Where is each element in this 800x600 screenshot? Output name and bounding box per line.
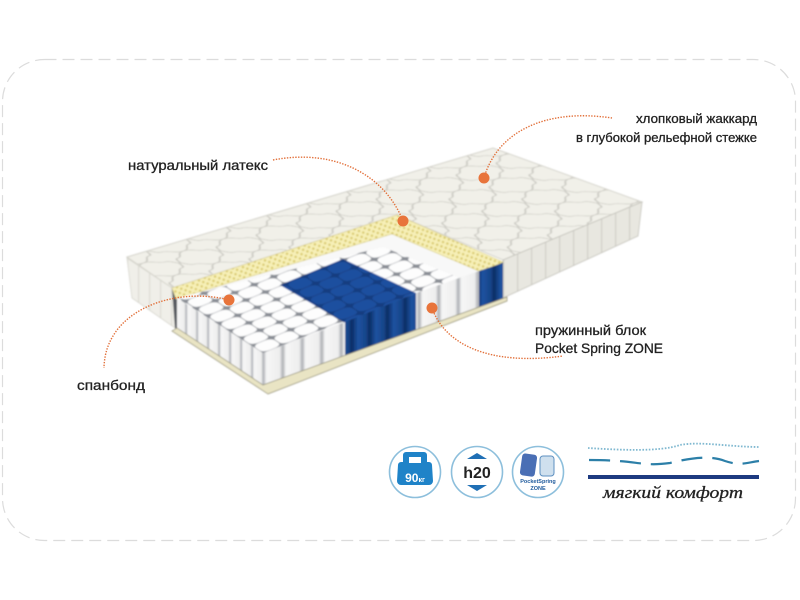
label: cotton jacquard	[576, 111, 757, 145]
label: spring block: пружинный блок	[535, 322, 647, 338]
callout: spring block	[426, 302, 563, 358]
front coils, blue section	[345, 293, 416, 356]
label: cotton jacquard: в глубокой рельефной стежке	[576, 130, 757, 145]
dashed rounded frame	[2, 60, 796, 540]
label: cotton jacquard: хлопковый жаккард	[636, 111, 757, 126]
callout: spunbond	[104, 294, 234, 368]
icon: pocket spring zone	[512, 446, 564, 498]
logo: soft comfort: мягкий комфорт	[602, 483, 743, 502]
icon: 90 kg weight: 90кг	[405, 471, 425, 485]
dark interior behind springs	[172, 262, 503, 392]
left end fabric	[127, 258, 175, 328]
callout: cotton jacquard	[478, 116, 612, 184]
mattress illustration	[127, 148, 642, 394]
icon: height 20	[452, 446, 502, 498]
callout: natural latex	[273, 157, 408, 226]
front coils, white section right	[416, 271, 479, 330]
label: spring block: Pocket Spring ZONE	[535, 340, 663, 356]
icon: height 20: h20	[463, 465, 491, 482]
front coils, blue section right	[479, 263, 503, 307]
icon: pocket spring zone: ZONE	[530, 486, 546, 492]
left face coils	[177, 298, 263, 386]
right side fabric	[503, 202, 642, 298]
logo: soft comfort	[588, 444, 760, 502]
spring block top, blue zone	[280, 259, 416, 323]
quilted jacquard top surface	[127, 148, 642, 288]
white spunbond layer	[176, 234, 482, 353]
icon: pocket spring zone: PocketSpring	[520, 479, 556, 485]
latex layer	[172, 215, 503, 299]
label: spunbond: спанбонд	[77, 377, 145, 393]
bottom latex layer	[172, 297, 507, 394]
label: natural latex: натуральный латекс	[128, 157, 268, 173]
spring block top, white coils	[177, 247, 462, 353]
icon: 90 kg weight	[390, 446, 440, 498]
front coils, white section	[263, 322, 345, 386]
label: spring block	[535, 322, 663, 356]
